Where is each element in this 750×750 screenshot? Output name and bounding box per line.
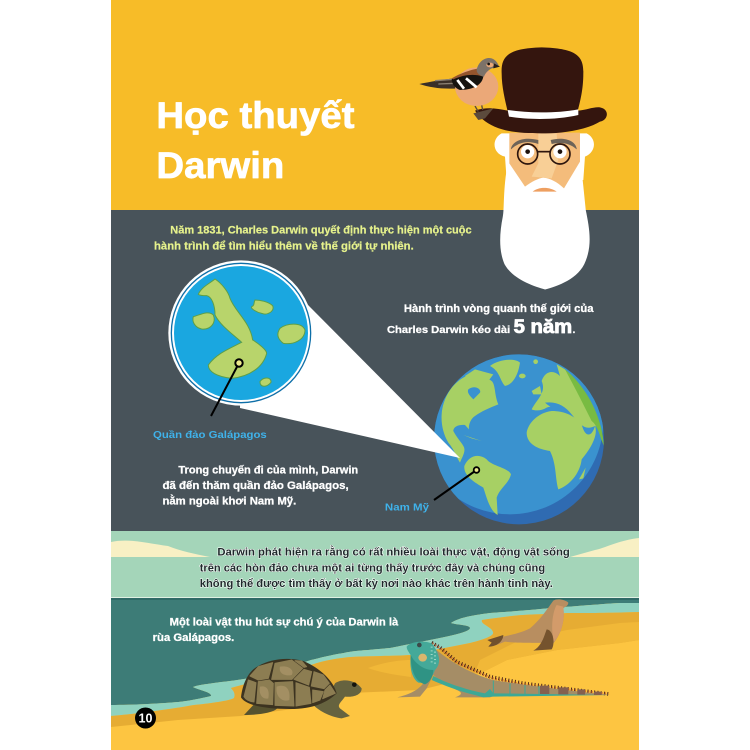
icon: sea lion xyxy=(487,599,568,651)
text: 1831 intro xyxy=(154,225,472,253)
text: Darwin discovery: trên các hòn đảo chưa một ai từng thấy trước đây và chúng cũng xyxy=(200,562,545,574)
text: 5-year voyage: Hành trình vòng quanh thế giới của xyxy=(404,303,595,315)
pointer: Nam Mỹ xyxy=(434,467,479,500)
page number badge xyxy=(135,708,156,728)
icon: tortoise xyxy=(241,659,362,718)
panel: voyage diagram xyxy=(153,260,608,528)
text: 5-year voyage: Charles Darwin kéo dài xyxy=(387,325,510,336)
text: Galápagos tortoise intro: Một loài vật thu hút sự chú ý của Darwin là xyxy=(170,616,399,628)
pointer: Galápagos xyxy=(211,359,243,416)
mid sand patches xyxy=(368,622,639,677)
light green band xyxy=(111,531,639,598)
icon: Darwin portrait xyxy=(475,47,607,290)
panel: beach scene xyxy=(111,531,639,750)
title: Học thuyết xyxy=(156,94,354,136)
map circle: Galápagos islands xyxy=(168,260,314,406)
label: Quần đảo Galápagos: Quần đảo Galápagos xyxy=(153,429,267,441)
icon: iguana xyxy=(397,642,610,697)
text: 5-year voyage: 5 năm xyxy=(514,316,572,338)
foam xyxy=(111,603,639,716)
head and hat xyxy=(475,47,607,192)
beard xyxy=(500,163,590,290)
text: 5-year voyage xyxy=(387,303,594,334)
title: Darwin xyxy=(156,144,284,186)
text: Darwin discovery: Darwin phát hiện ra rằng có rất nhiều loài thực vật, động vật sống xyxy=(217,545,570,558)
darker sand xyxy=(111,612,639,727)
text: Darwin discovery xyxy=(200,545,570,590)
text: Galápagos off South America: Trong chuyến đi của mình, Darwin xyxy=(178,464,358,476)
magnifier cone xyxy=(240,305,460,458)
panel: yellow header xyxy=(111,0,639,210)
text: Galápagos tortoise intro xyxy=(153,616,399,644)
text: Galápagos off South America: nằm ngoài khơi Nam Mỹ. xyxy=(162,494,296,507)
sea xyxy=(111,598,639,705)
cream dunes xyxy=(111,538,639,557)
title xyxy=(158,99,354,179)
label: Nam Mỹ: Nam Mỹ xyxy=(385,503,429,514)
text: Darwin discovery: không thể được tìm thấy ở bất kỳ nơi nào khác trên hành tinh này. xyxy=(200,578,553,590)
text: Galápagos off South America: đã đến thăm quần đảo Galápagos, xyxy=(162,480,349,492)
text: 1831 intro: Năm 1831, Charles Darwin quyết định thực hiện một cuộc xyxy=(170,225,472,237)
text: 1831 intro: hành trình để tìm hiểu thêm về thế giới tự nhiên. xyxy=(154,241,414,253)
text: Galápagos tortoise intro: rùa Galápagos. xyxy=(153,632,234,644)
text: 5-year voyage: . xyxy=(573,325,576,336)
icon: finch on hat xyxy=(419,58,500,120)
text: Galápagos off South America xyxy=(162,464,358,507)
page number badge: 10 xyxy=(139,712,152,726)
panel: dark voyage section xyxy=(111,210,639,531)
globe xyxy=(434,354,604,524)
